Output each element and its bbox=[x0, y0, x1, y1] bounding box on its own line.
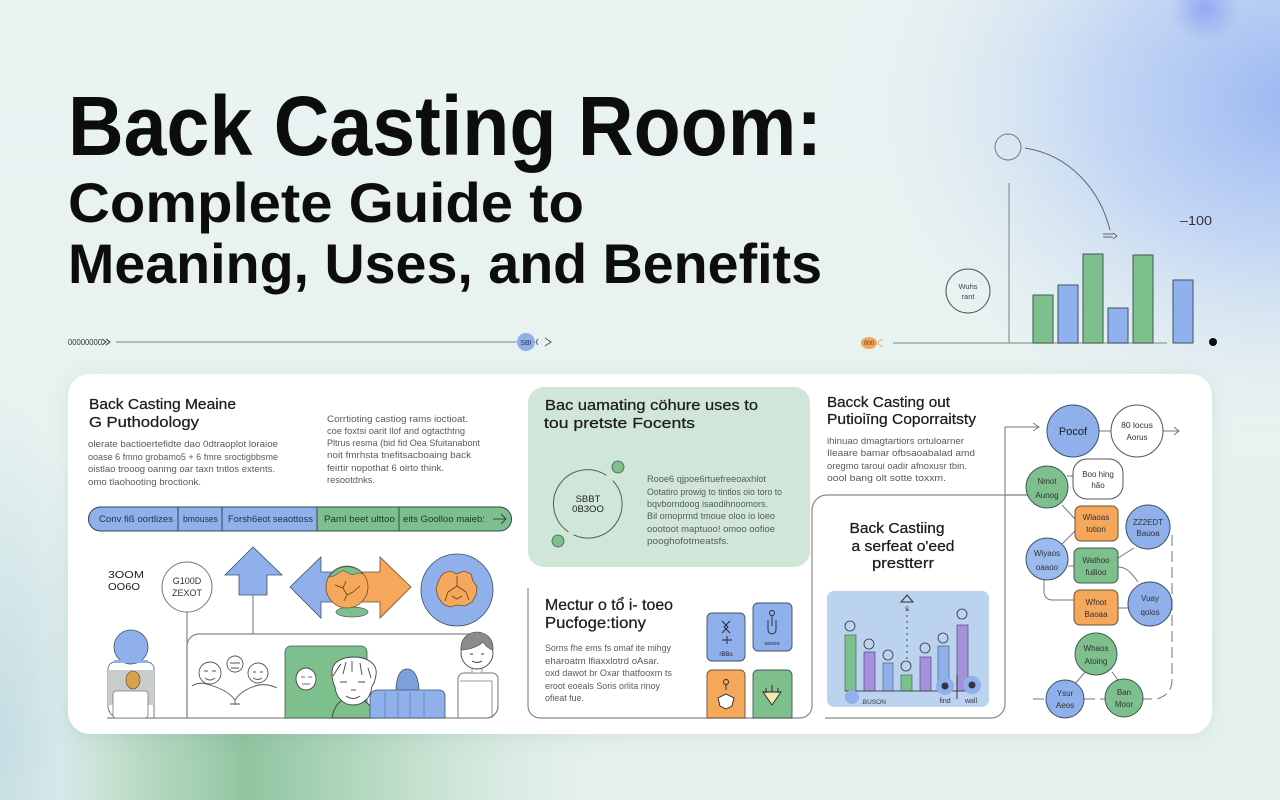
heading: capability: Putioiīng Coporraitsty bbox=[827, 411, 977, 428]
process bar: Forsh6eot seaottoss bbox=[228, 514, 313, 525]
node: So locus bbox=[1111, 405, 1163, 457]
text block: lower middle: eharoatm lfiaxxlotrd oAsar. bbox=[545, 656, 659, 667]
text block: lower middle bbox=[545, 643, 672, 704]
circle callout: ZEXOT bbox=[172, 588, 202, 598]
arrows: left and right with globe bbox=[290, 557, 411, 618]
process bar bbox=[88, 507, 512, 531]
heading: chart: prestterr bbox=[872, 555, 934, 572]
top right bar chart: Wuhs bbox=[958, 282, 978, 291]
node: green bottom right: Ban bbox=[1117, 688, 1131, 697]
bar chart: wall bbox=[964, 698, 977, 705]
heading: lower middle: Mectur o tổ i- toeo bbox=[545, 596, 673, 614]
bar chart: S bbox=[905, 607, 909, 613]
cycle diagram: SBBT bbox=[576, 494, 601, 505]
node: orange 1: totion bbox=[1086, 525, 1106, 534]
text block: uses: Ootatiro prowig to tintlos oio toro to bbox=[647, 487, 782, 498]
cycle diagram: 0B3OO bbox=[572, 504, 604, 515]
bar chart: find bbox=[939, 698, 951, 705]
figure: central person bbox=[332, 657, 376, 718]
heading: uses: Bac uamating cöhure uses to bbox=[545, 397, 758, 414]
text block: lower middle: eroot eoeals Soris orlita rinoy bbox=[545, 681, 660, 692]
text block: capability: oool bang olt sotte toxxm. bbox=[827, 473, 946, 484]
text block: capability bbox=[827, 436, 975, 484]
node: blue right 1 bbox=[1126, 505, 1170, 549]
text block: methodology left: oistlao trooog oanmg oar taxn tntlos extents. bbox=[88, 464, 275, 475]
node: green what: Nmot bbox=[1037, 477, 1057, 486]
timeline divider bbox=[68, 333, 551, 351]
node: blue right 2 bbox=[1128, 582, 1172, 626]
panel: lower middle bbox=[528, 495, 1030, 718]
text block: uses: Rooe6 qjpoe6rtuefreeoaxhlot bbox=[647, 474, 766, 485]
flow diagram bbox=[1005, 405, 1179, 718]
top right bar chart: –100 bbox=[1180, 213, 1212, 228]
text block: methodology right bbox=[327, 414, 480, 486]
text block: methodology right: resootdnks. bbox=[327, 475, 375, 486]
heading: chart bbox=[850, 520, 954, 572]
bar chart bbox=[845, 595, 981, 706]
text block: uses: oootoot maptuoo! omoo oofioe bbox=[647, 524, 775, 535]
bar chart: .BUSON bbox=[861, 699, 886, 706]
panel outline bbox=[825, 427, 1005, 718]
text block: lower middle: ofieat fue. bbox=[545, 693, 584, 704]
section: methodology bbox=[88, 396, 512, 718]
timeline divider: SBI bbox=[520, 340, 532, 347]
text block: capability: oregmo taroui oadir afnoxusr tbin. bbox=[827, 461, 967, 472]
heading: uses bbox=[544, 397, 758, 432]
arrow: up bbox=[225, 547, 282, 634]
node: blue left: Wiyaos bbox=[1034, 549, 1060, 558]
node: green what: Aunog bbox=[1035, 491, 1059, 500]
label: room code bbox=[108, 569, 144, 593]
node: blue right 2: Vuay bbox=[1141, 594, 1159, 603]
text block: methodology right: coe foxtsi oarit llof and ogtacthtng bbox=[327, 426, 465, 437]
node: green bottom: Atoing bbox=[1085, 657, 1107, 666]
node: orange 2: Baoaa bbox=[1084, 610, 1108, 619]
node: blue right 2: qolos bbox=[1140, 608, 1160, 617]
heading: chart: a serfeat o'eed bbox=[852, 538, 954, 555]
node: orange 1 bbox=[1075, 506, 1118, 541]
figure: right person bbox=[458, 632, 498, 718]
figure: seated person in blue bbox=[370, 669, 445, 718]
icon cards: uoooo bbox=[764, 641, 780, 647]
icon cards bbox=[707, 603, 792, 718]
node: blue left bbox=[1026, 538, 1068, 580]
figures: audience group bbox=[192, 656, 277, 705]
circle callout bbox=[162, 562, 212, 718]
timeline divider: 00000000 bbox=[68, 338, 103, 347]
process bar: Paml beet ulttoo bbox=[324, 514, 395, 525]
process bar: Conv fiß oortlizes bbox=[99, 514, 173, 525]
node: green bottom right: Moor bbox=[1115, 700, 1133, 709]
top right bar chart: rant bbox=[962, 292, 975, 301]
top right bar chart: 000 bbox=[864, 341, 875, 347]
text block: capability: ihinuao dmagtartiors ortuloarner bbox=[827, 436, 964, 447]
title: Back Casting Room: bbox=[68, 79, 822, 173]
node: white rounded: Boo hing bbox=[1082, 470, 1114, 479]
node: So locus: Aorus bbox=[1127, 433, 1147, 442]
text block: uses bbox=[647, 474, 782, 547]
section: capability text bbox=[827, 394, 977, 484]
node: green what bbox=[1026, 466, 1068, 508]
text block: methodology right: noit fmrhsta tnefitsacboaing back bbox=[327, 450, 471, 461]
top right bar chart bbox=[861, 134, 1217, 349]
heading: capability: Bacck Casting out bbox=[827, 394, 951, 411]
node: green bottom: Whaos bbox=[1084, 644, 1108, 653]
text block: lower middle: oxd dawot br Oxar thatfooxm ts bbox=[545, 668, 672, 679]
node: Pocof: Pocof bbox=[1059, 426, 1088, 438]
text block: methodology left: ooase 6 fmno grobamo5 + 6 fmre sroctigbbsme bbox=[88, 452, 278, 463]
connectors bbox=[1005, 423, 1179, 700]
node: blue right 1: ZZ2EDT bbox=[1133, 518, 1163, 527]
heading: lower middle bbox=[545, 596, 673, 632]
process bar: bmouses bbox=[183, 514, 218, 525]
node: blue bottom bbox=[1046, 680, 1084, 718]
text block: methodology right: Pltrus resma (bid fid Oea Sfuitanabont bbox=[327, 438, 480, 449]
panel: green uses bbox=[528, 387, 810, 567]
node: green bottom bbox=[1075, 633, 1117, 675]
heading: methodology: G Puthodology bbox=[89, 414, 200, 431]
circle callout: G100D bbox=[173, 576, 202, 586]
node: green rect bbox=[1074, 548, 1118, 583]
main white panel bbox=[68, 374, 1212, 734]
node: So locus: 80 locus bbox=[1121, 420, 1153, 430]
heading: chart: Back Castiing bbox=[850, 520, 944, 537]
cycle diagram bbox=[552, 461, 624, 547]
heading: uses: tou pretste Focents bbox=[544, 415, 695, 432]
node: green bottom right bbox=[1105, 679, 1143, 717]
node: Pocof bbox=[1047, 405, 1099, 457]
title: Complete Guide to bbox=[68, 171, 584, 234]
screen: green board with faces bbox=[285, 646, 367, 718]
node: white rounded bbox=[1073, 459, 1123, 499]
text block: uses: pooghofotmeatsfs. bbox=[647, 536, 729, 547]
label: room code: OO6O bbox=[108, 581, 140, 593]
text block: uses: Bil omoprmd tmoue oloo io loeo bbox=[647, 511, 775, 522]
text block: uses: bqvborndoog isaodihnoomors. bbox=[647, 499, 768, 510]
node: blue right 1: Bauoa bbox=[1136, 529, 1160, 538]
node: blue left: oaaoo bbox=[1036, 563, 1059, 572]
node: green rect: fuilioo bbox=[1086, 568, 1107, 577]
title bbox=[68, 79, 822, 295]
node: blue bottom: Aeos bbox=[1056, 701, 1074, 710]
text block: methodology left bbox=[88, 439, 278, 488]
label: room code: 3OOM bbox=[108, 569, 144, 581]
text block: methodology right: feirtir nopothat 6 oirto think. bbox=[327, 463, 444, 474]
process bar: eits Goolloo maieb: bbox=[403, 514, 485, 525]
node: blue bottom: Ysur bbox=[1057, 689, 1074, 698]
heading: methodology: Back Casting Meaine bbox=[89, 396, 236, 413]
title: Meaning, Uses, and Benefits bbox=[68, 232, 822, 295]
text block: lower middle: Sorns fhe ems fs omaf ite mihgy bbox=[545, 643, 671, 654]
heading: lower middle: Pucfoge:tiony bbox=[545, 615, 646, 632]
text block: methodology right: Corrtioting castiog rams ioctioat. bbox=[327, 414, 468, 425]
icon: orange emblem in blue circle bbox=[421, 554, 493, 626]
node: green rect: Wathoo bbox=[1082, 556, 1110, 565]
node: orange 2: Wfnot bbox=[1086, 598, 1107, 607]
heading: capability bbox=[827, 394, 977, 428]
panel outline bbox=[528, 495, 1030, 718]
text block: capability: Ileaare bamar ofbsaoabalad amd bbox=[827, 448, 975, 459]
node: orange 2 bbox=[1074, 590, 1118, 625]
room scene outline bbox=[107, 634, 498, 718]
text block: methodology left: omo tlaohooting broctionk. bbox=[88, 477, 201, 488]
panel: back casting chart bbox=[825, 427, 1005, 718]
icon cards: rBBo bbox=[719, 652, 733, 658]
chart card bbox=[827, 591, 989, 707]
node: white rounded: hão bbox=[1091, 481, 1105, 490]
node: orange 1: Wlaoas bbox=[1083, 513, 1109, 522]
text block: methodology left: olerate bactioertefidte dao 0dtraoplot loraioe bbox=[88, 439, 278, 450]
figure: left presenter booth bbox=[108, 630, 154, 718]
heading: methodology bbox=[89, 396, 236, 431]
